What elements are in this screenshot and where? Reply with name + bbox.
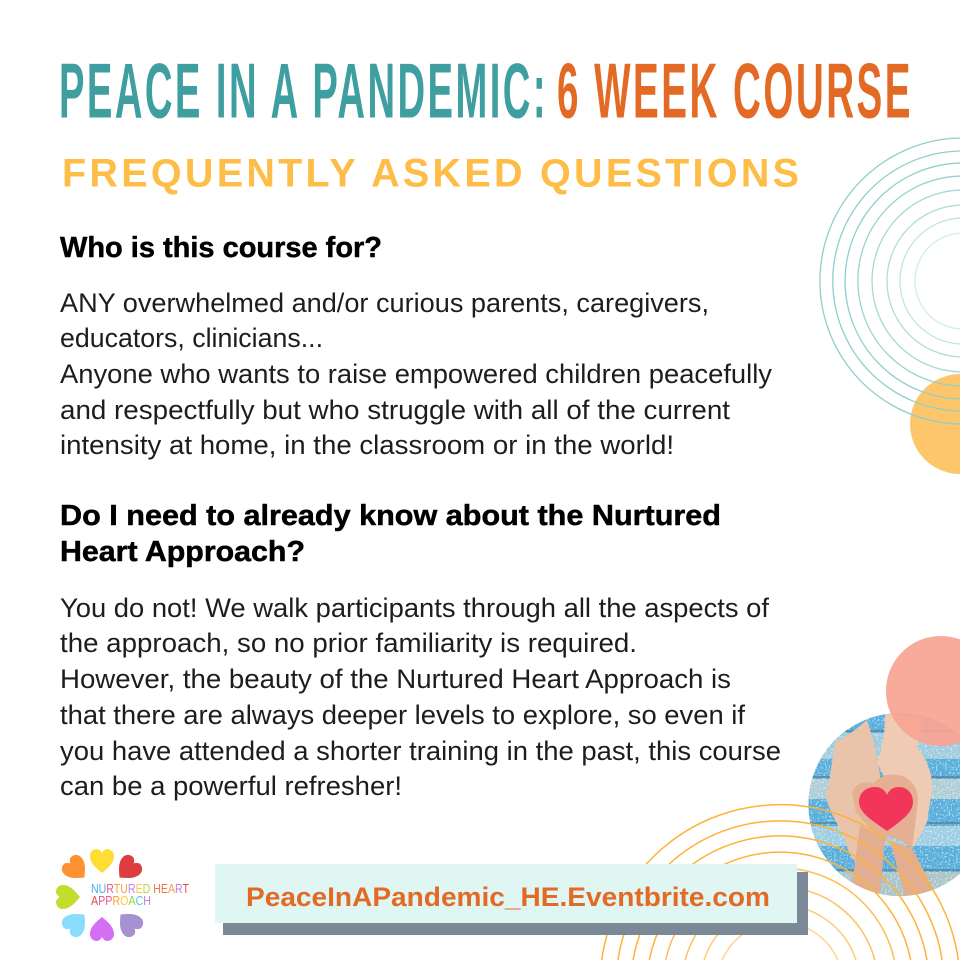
decoration: orange circle xyxy=(910,374,960,474)
logo: Nurtured Heart Approach: APPROACH xyxy=(91,894,151,908)
decoration: orange concentric rings xyxy=(602,805,958,960)
text block: answer one: and respectfully but who struggle with all of the current xyxy=(60,395,731,425)
text block: answer one xyxy=(60,288,772,460)
text block: answer one: Anyone who wants to raise empowered children peacefully xyxy=(60,359,772,389)
text block: answer two xyxy=(60,593,781,801)
text block: answer two: that there are always deeper levels to explore, so even if xyxy=(60,700,745,730)
heading: who is this course for: Who is this course for? xyxy=(60,232,382,264)
logo: Nurtured Heart Approach xyxy=(56,849,189,941)
subtitle: FREQUENTLY ASKED QUESTIONS xyxy=(62,152,799,196)
heading: prior knowledge question: Heart Approach? xyxy=(60,536,305,568)
logo: Nurtured Heart Approach: NURTURED HEART xyxy=(91,882,189,896)
text block: answer one: ANY overwhelmed and/or curious parents, caregivers, xyxy=(60,288,709,318)
text block: answer two: the approach, so no prior familiarity is required. xyxy=(60,628,637,658)
text block: answer two: You do not! We walk participants through all the aspects of xyxy=(60,593,769,623)
link box with shadow xyxy=(215,864,808,935)
text block: answer two: However, the beauty of the Nurtured Heart Approach is xyxy=(60,664,731,694)
heading: prior knowledge question xyxy=(60,500,721,568)
text block: answer two: can be a powerful refresher! xyxy=(60,771,402,801)
url text: PeaceInAPandemic_HE.Eventbrite.com xyxy=(246,882,770,912)
text block: answer one: educators, clinicians... xyxy=(60,323,323,353)
decoration: salmon circle xyxy=(886,636,960,746)
photo: hands holding a red heart xyxy=(805,710,960,900)
decoration: teal concentric rings xyxy=(820,138,960,424)
heading: prior knowledge question: Do I need to already know about the Nurtured xyxy=(60,500,721,532)
text block: answer two: you have attended a shorter training in the past, this course xyxy=(60,736,781,766)
text block: answer one: intensity at home, in the classroom or in the world! xyxy=(60,430,674,460)
